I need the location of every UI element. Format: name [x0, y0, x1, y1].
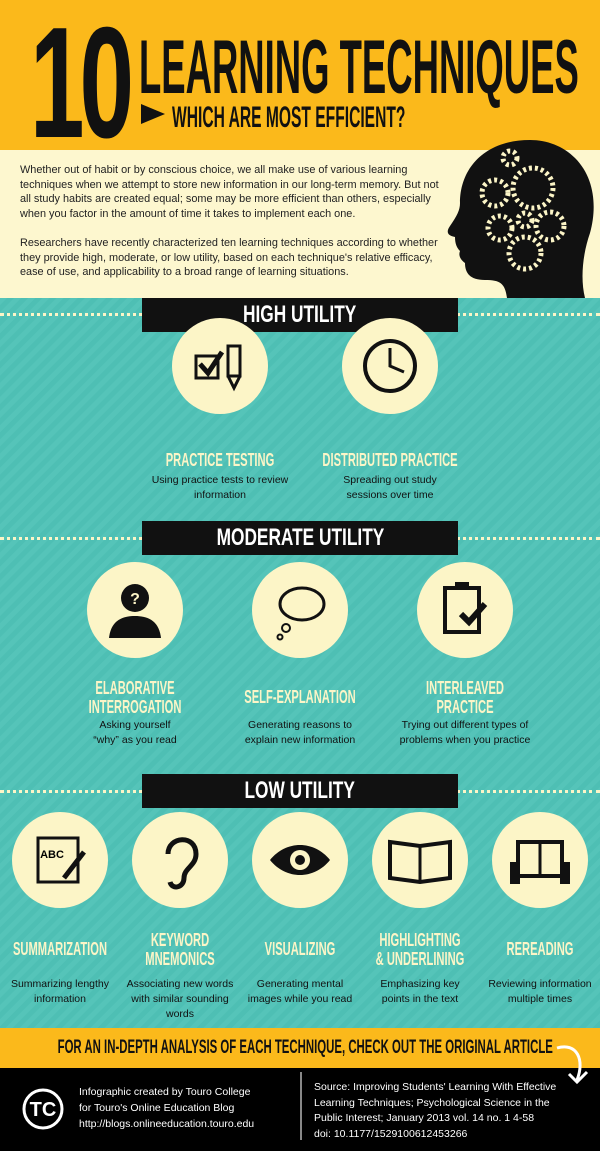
logo: TC — [30, 1099, 56, 1121]
banner: moderate utility — [142, 521, 458, 555]
source: Source: Improving Students' Learning With Effective — [314, 1081, 556, 1093]
low: summarization: SUMMARIZATION — [13, 939, 107, 959]
moderate: interleaved practice — [400, 562, 530, 746]
low: rereading: Reviewing information multiple times — [488, 978, 592, 1005]
low: keyword mnemonics: Associating new words with similar sounding words — [127, 978, 233, 1020]
moderate: interleaved practice: INTERLEAVED — [426, 678, 504, 698]
low: visualizing: VISUALIZING — [265, 939, 335, 959]
intro text — [20, 164, 439, 278]
teal striped background — [0, 298, 600, 1028]
intro text: Researchers have recently characterized ten learning techniques according to whether they provide high, moderate, or low utility, based on each technique's relative efficacy, ease of use, and applicability to a broad range of learning situations. — [20, 237, 438, 278]
moderate: interleaved practice: PRACTICE — [436, 697, 494, 717]
high: practice testing — [152, 318, 288, 501]
low: highlighting: Emphasizing key points in the text — [380, 978, 460, 1005]
moderate: elaborative interrogation: Asking yourself — [99, 719, 171, 731]
subtitle arrow — [141, 104, 165, 124]
icon: person question — [87, 562, 183, 658]
moderate: elaborative interrogation: INTERROGATION — [89, 697, 181, 717]
credits: for Touro's Online Education Blog — [79, 1102, 234, 1114]
low: highlighting: HIGHLIGHTING — [379, 930, 461, 950]
icon: paper ABC — [12, 812, 108, 908]
credits: Infographic created by Touro College — [79, 1086, 250, 1098]
source — [314, 1081, 556, 1140]
banner: high utility — [142, 298, 458, 332]
moderate: interleaved practice: Trying out different types of problems when you practice — [400, 719, 530, 746]
icon: paper ABC: ABC — [40, 849, 64, 861]
subtitle: WHICH ARE MOST EFFICIENT? — [172, 101, 405, 134]
high: distributed practice: Spreading out study sessions over time — [343, 474, 437, 501]
moderate: elaborative interrogation: ELABORATIVE — [95, 678, 175, 698]
high: practice testing: PRACTICE TESTING — [166, 450, 274, 470]
icon: open book — [372, 812, 468, 908]
banner: low utility: LOW UTILITY — [245, 777, 355, 804]
dividers — [0, 313, 600, 316]
low: visualizing: Generating mental images while you read — [248, 978, 352, 1005]
title number: 10 — [30, 0, 129, 171]
header — [0, 0, 600, 150]
icon: clock — [342, 318, 438, 414]
low: keyword mnemonics: MNEMONICS — [145, 949, 215, 969]
arrow — [556, 1045, 588, 1084]
low: summarization: Summarizing lengthy information — [11, 978, 109, 1005]
moderate: elaborative interrogation — [87, 562, 183, 746]
title: LEARNING TECHNIQUES — [139, 25, 579, 110]
low: rereading — [488, 812, 592, 1005]
high: practice testing: Using practice tests to review information — [152, 474, 288, 501]
banner: low utility — [142, 774, 458, 808]
credits: http://blogs.onlineeducation.touro.edu — [79, 1118, 254, 1130]
footer — [0, 1068, 600, 1151]
icon: checkbox and pencil — [172, 318, 268, 414]
call to action bar: FOR AN IN-DEPTH ANALYSIS OF EACH TECHNIQUE, CHECK OUT THE ORIGINAL ARTICLE — [58, 1037, 553, 1058]
moderate: self-explanation: SELF-EXPLANATION — [244, 687, 356, 707]
source: Public Interest; January 2013 vol. 14 no. 1 4-58 — [314, 1112, 534, 1124]
call to action bar — [0, 1028, 600, 1068]
icon: hands holding book — [492, 812, 588, 908]
source: doi: 10.1177/1529100612453266 — [314, 1128, 467, 1140]
low: summarization — [11, 812, 109, 1005]
source: Learning Techniques; Psychological Science in the — [314, 1096, 550, 1108]
high: distributed practice — [322, 318, 458, 501]
icon: person question: ? — [130, 591, 140, 608]
low: keyword mnemonics — [126, 812, 233, 1020]
moderate: self-explanation — [244, 562, 356, 746]
intro text: Whether out of habit or by conscious choice, we all make use of various learning techniques when we attempt to store new information in our long-term memory. But not all study habits are created equal; some may be more efficient than others, especially when you factor in the amount of time it takes to implement each one. — [20, 164, 439, 220]
banner: high utility: HIGH UTILITY — [243, 301, 357, 328]
low: keyword mnemonics: KEYWORD — [151, 930, 209, 950]
icon: clipboard check — [417, 562, 513, 658]
icon: thought bubble — [252, 562, 348, 658]
banner: moderate utility: MODERATE UTILITY — [216, 524, 384, 551]
icon: ear — [132, 812, 228, 908]
moderate: self-explanation: Generating reasons to explain new information — [245, 719, 355, 746]
icon: eye — [252, 812, 348, 908]
moderate: elaborative interrogation: “why” as you read — [93, 734, 177, 746]
low: visualizing — [248, 812, 352, 1005]
logo — [22, 1088, 64, 1130]
low: highlighting — [372, 812, 468, 1005]
low: highlighting: & UNDERLINING — [376, 949, 464, 969]
low: rereading: REREADING — [507, 939, 573, 959]
icon: head with gears — [448, 140, 594, 298]
credits — [79, 1086, 254, 1130]
intro panel — [0, 150, 600, 298]
high: distributed practice: DISTRIBUTED PRACTICE — [322, 450, 458, 470]
